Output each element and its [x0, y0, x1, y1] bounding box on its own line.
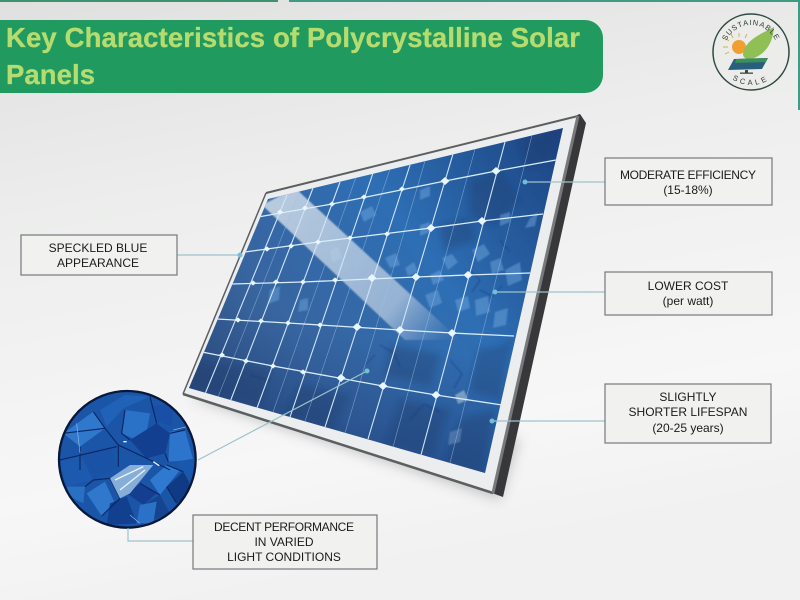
logo text — [722, 20, 780, 85]
callout: shorter lifespan: SHORTER LIFESPAN — [629, 405, 747, 419]
photovoltaic cells — [189, 128, 563, 473]
frame outer shade — [183, 116, 578, 493]
logo: Sustainable Scale — [712, 13, 790, 91]
dark side of frame — [492, 114, 586, 497]
leader line — [522, 180, 605, 184]
title text: Key Characteristics of Polycrystalline Solar — [6, 22, 580, 53]
callout: decent performance — [128, 368, 377, 569]
logo text: SUSTAINABLE — [722, 20, 780, 40]
minor grid lines — [218, 135, 532, 463]
callout: moderate efficiency: MODERATE EFFICIENCY — [620, 168, 756, 182]
callout: decent performance: DECENT PERFORMANCE — [214, 520, 354, 534]
callout: lower cost: (per watt) — [663, 294, 713, 308]
leader line — [177, 252, 242, 258]
logo text: SCALE — [733, 76, 767, 85]
callout: shorter lifespan — [490, 384, 771, 443]
callout: moderate efficiency — [522, 158, 772, 205]
top border strip — [0, 0, 800, 110]
title text: Panels — [6, 59, 95, 90]
glare band — [262, 188, 460, 340]
busbars — [202, 160, 556, 405]
callout: decent performance: IN VARIED — [254, 535, 314, 549]
leader lines — [128, 368, 370, 541]
callout: speckled blue appearance — [21, 235, 242, 275]
dark crystal patches — [185, 128, 560, 472]
front frame — [183, 116, 578, 493]
callout: decent performance: LIGHT CONDITIONS — [227, 550, 341, 564]
solar panel — [180, 114, 586, 500]
shard cracks — [60, 397, 185, 516]
callout: moderate efficiency: (15-18%) — [663, 183, 713, 197]
panel shadow — [190, 370, 520, 500]
leader line — [492, 290, 605, 294]
callout: shorter lifespan: (20-25 years) — [652, 421, 724, 435]
callout: speckled blue appearance: APPEARANCE — [57, 256, 139, 270]
cell junction diamonds — [219, 167, 500, 399]
callout: speckled blue appearance: SPECKLED BLUE — [49, 241, 147, 255]
title banner — [0, 20, 603, 93]
major grid lines — [205, 142, 505, 455]
leader line — [490, 418, 605, 424]
circle rim — [59, 391, 196, 528]
crystal shards — [60, 395, 195, 525]
crystal speckles — [250, 186, 538, 445]
shattered highlight — [110, 465, 153, 498]
callout: lower cost — [492, 272, 772, 315]
callout: lower cost: LOWER COST — [648, 279, 729, 293]
callout: shorter lifespan: SLIGHTLY — [659, 390, 717, 404]
magnified crystal circle — [59, 391, 196, 528]
logo leaf — [743, 27, 774, 59]
logo sun — [723, 33, 747, 54]
logo solar panel — [728, 58, 768, 74]
